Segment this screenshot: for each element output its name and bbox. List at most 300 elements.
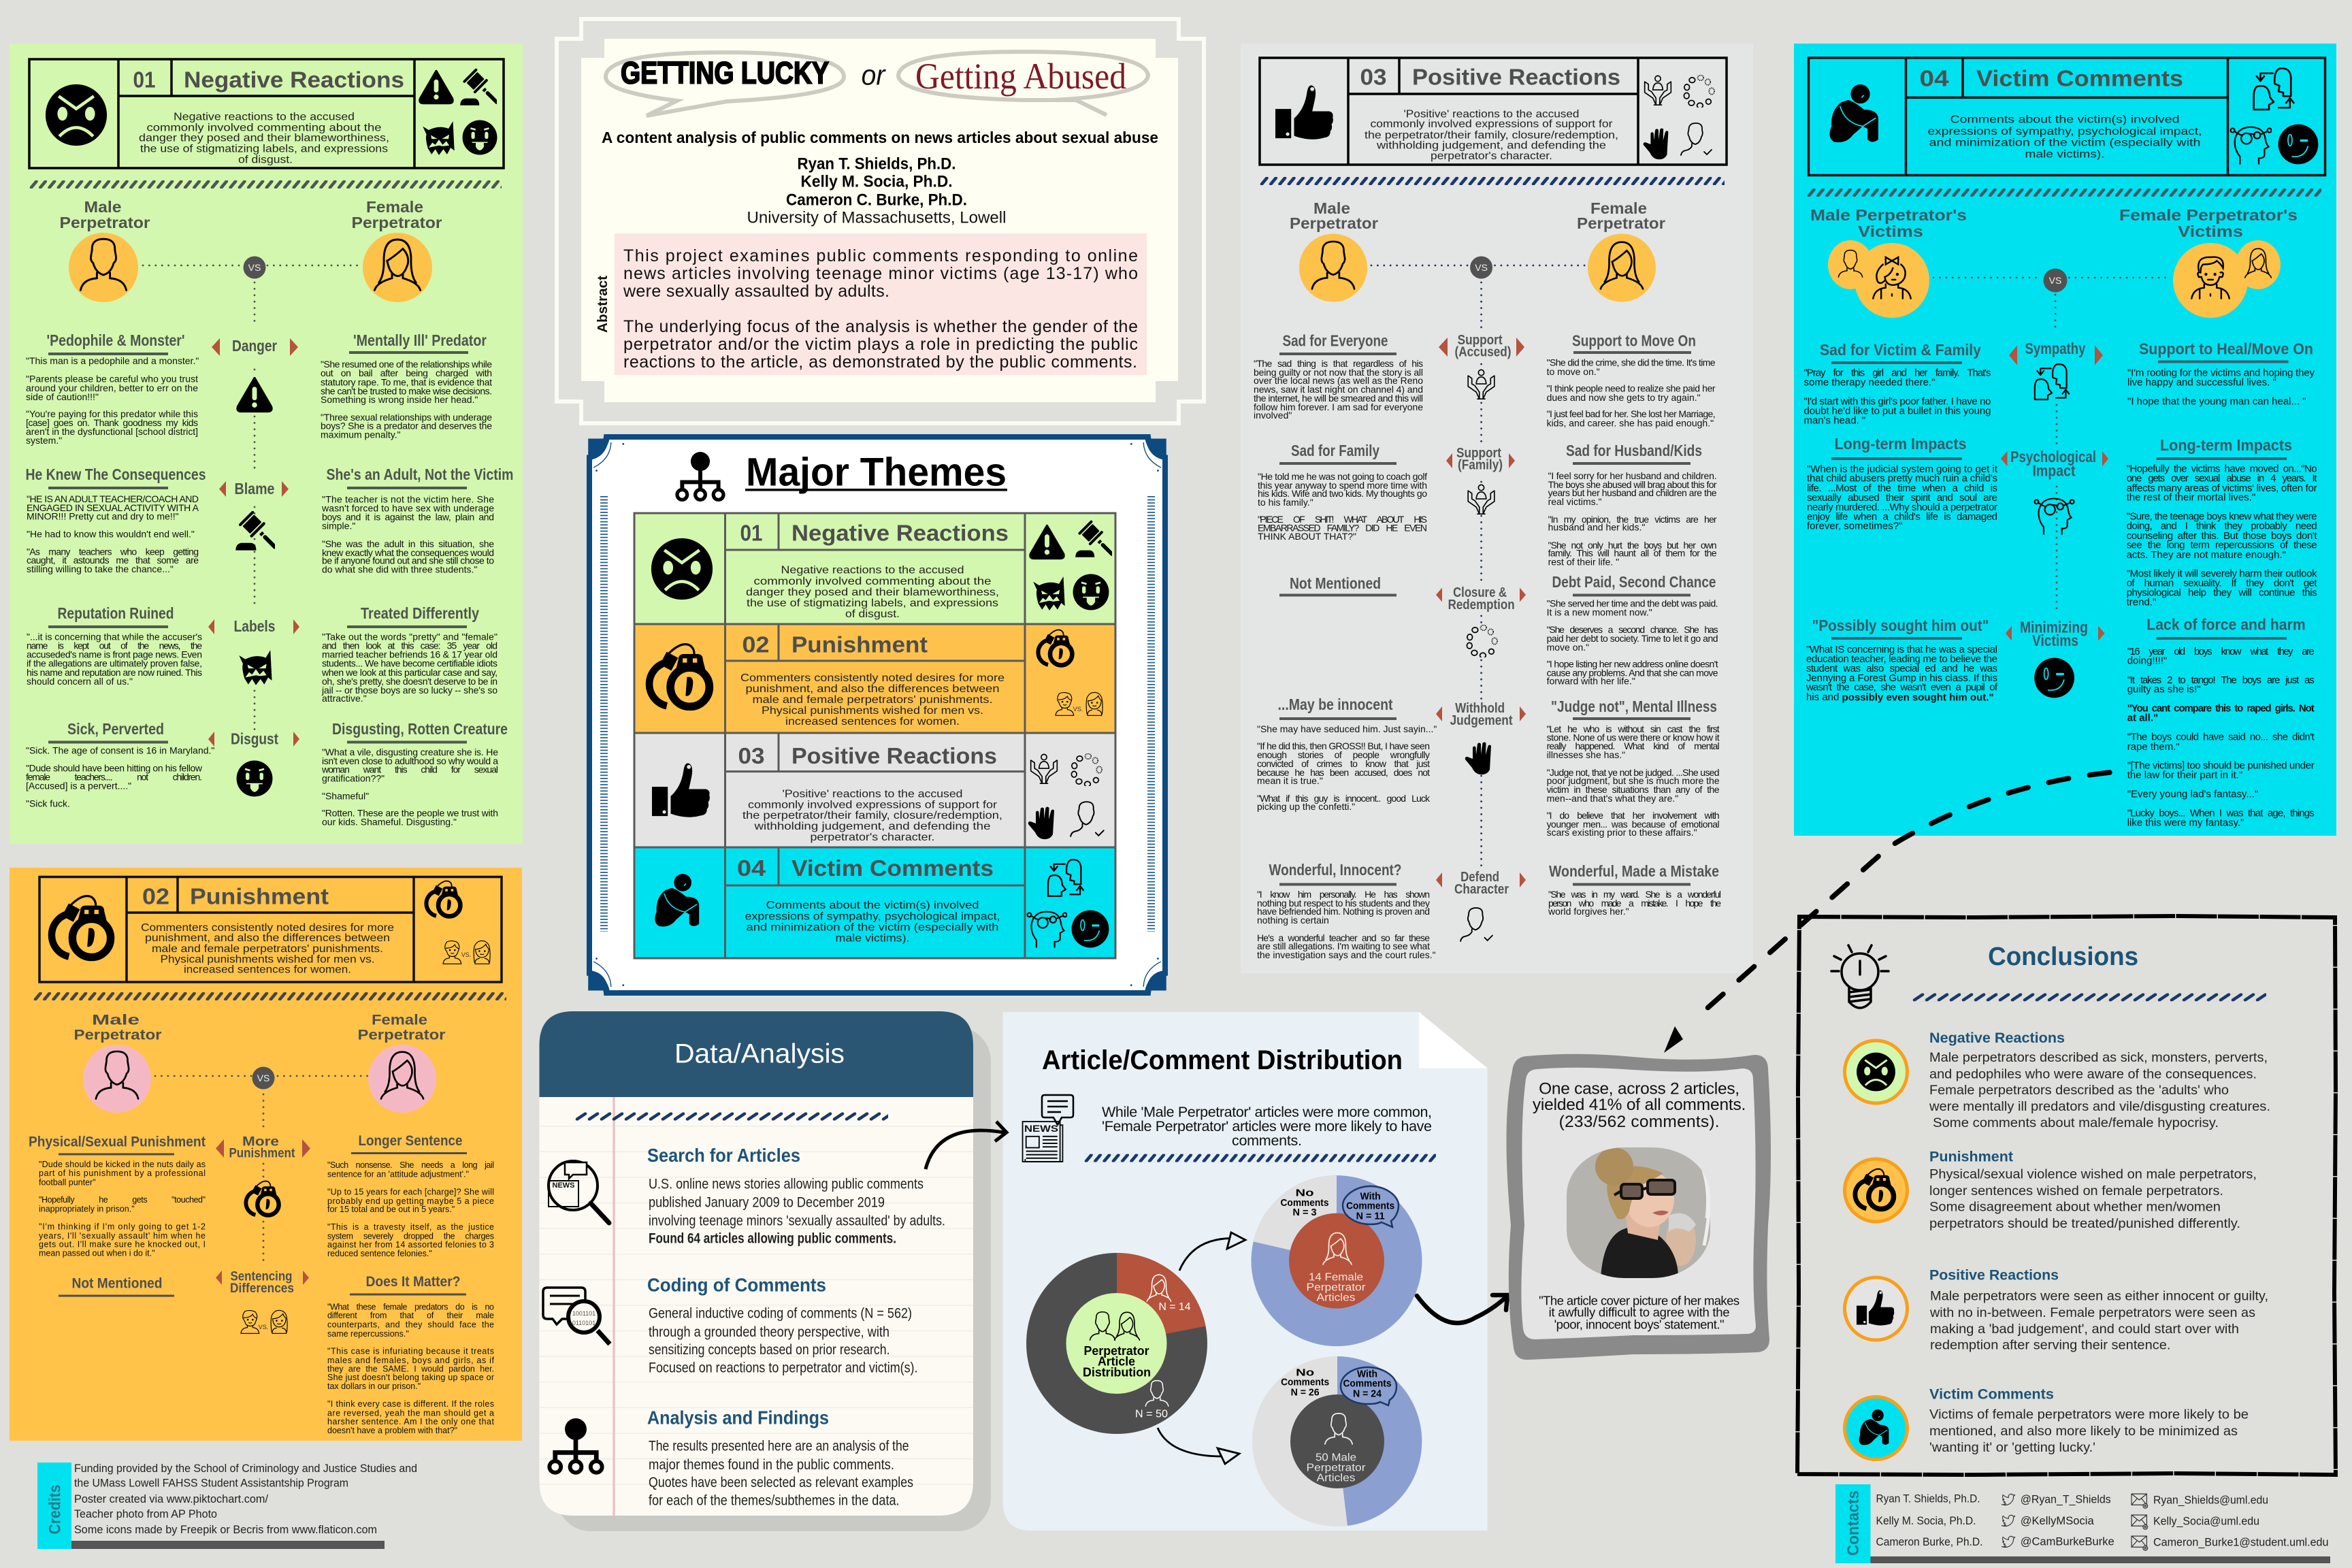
theme: support accused: "I just feel bad for her. She lost her Marriage, <box>1547 408 1716 419</box>
theme: blame: She's an Adult, Not the Victim <box>327 466 513 483</box>
theme: minimizing victims: at all." <box>2127 712 2158 724</box>
chart: female perpetrator articles donut: Comments <box>1346 1200 1394 1211</box>
theme: sympathy: "I'd start with this girl's poor father. I have no <box>1803 396 1991 407</box>
row: 04 victim comments <box>655 855 1109 947</box>
row: 01 negative reactions: the use of stigmatizing labels, and expressions <box>747 598 998 609</box>
theme: psychological impact: enjoy life when a child's life is damaged <box>1807 511 1997 523</box>
heading: conclusions: Conclusions <box>1988 943 2138 971</box>
theme: labels: students... We have become certifiable idiots <box>322 658 497 669</box>
arrow: dashed link from victim comments to teacher case <box>1664 772 2110 1053</box>
theme: support accused: "She did the crime, she did the time. It's time <box>1547 357 1716 368</box>
theme: blame: "HE IS AN ADULT TEACHER/COACH AND <box>27 493 199 504</box>
theme: disgust: [Accused] is a pervert...." <box>26 781 131 791</box>
theme: psychological impact: sexually abused their spirit and soul are <box>1807 492 1997 504</box>
theme: disgust: "Sick. The age of consent is 16 in Maryland." <box>26 745 214 755</box>
chart: male perpetrator articles donut: Articles <box>1316 1473 1356 1484</box>
theme: disgust: female teachers.... not children. <box>26 772 202 783</box>
header: positive reactions: commonly involved expressions of support for <box>1371 118 1613 130</box>
contacts: Kelly M. Socia, Ph.D. <box>1876 1514 1976 1527</box>
theme: more punishment: years, I'll 'sexually assault' him when he <box>39 1231 206 1241</box>
row: 01 negative reactions: Negative reactions to the accused <box>781 565 964 576</box>
conclusion: negative reactions: Negative Reactions <box>1929 1030 2065 1046</box>
contacts: @KellyMSocia <box>2021 1514 2094 1527</box>
theme: support family: this year anyway to spend more time with <box>1258 480 1427 491</box>
title: GETTING LUCKY <box>621 56 829 90</box>
theme: psychological impact <box>1807 435 2317 608</box>
conclusion: punishment: Punishment <box>1929 1149 2013 1165</box>
theme: more punishment: Punishment <box>229 1146 295 1161</box>
male vs female heading row: VS <box>1475 262 1488 273</box>
theme: danger: aren't in the dysfunctional [school district] <box>26 426 198 437</box>
header: punishment <box>39 877 502 982</box>
theme: minimizing victims: doing!!!!" <box>2127 655 2167 667</box>
abstract: This project examines public comments responding to online <box>623 246 1138 265</box>
theme: support accused <box>1254 332 1716 429</box>
subtitle and authors: Ryan T. Shields, Ph.D. <box>798 155 956 173</box>
theme: closure and redemption: Not Mentioned <box>1290 574 1381 592</box>
theme: more punishment <box>29 1133 494 1258</box>
panel: 01 negative reactions <box>10 44 523 844</box>
theme: disgust: woman want this child for sexual <box>321 764 498 774</box>
header: victim comments <box>1809 58 2325 176</box>
theme: minimizing victims <box>1806 616 2315 829</box>
theme: disgust: "What a vile, disgusting creature she is. He <box>322 747 498 757</box>
theme: closure and redemption: paid her debt to society. Time to let it go and <box>1547 633 1718 644</box>
arrow: female articles to teacher case <box>1417 1295 1507 1323</box>
theme: disgust: Sick, Perverted <box>67 720 164 738</box>
theme: support family: EMBARRASSED FAMILY? DID HE EVEN <box>1258 523 1427 534</box>
subtitle and authors: University of Massachusetts, Lowell <box>747 208 1006 227</box>
theme: closure and redemption: "I hope listing her new address online doesn't <box>1547 659 1718 670</box>
theme: more punishment: against her from 14 assorted felonies to 3 <box>327 1240 494 1250</box>
theme: blame: wasn't forced to have sex with underage <box>321 503 494 514</box>
credits: Poster created via www.piktochart.com/ <box>74 1492 268 1505</box>
male vs female heading row: Female <box>372 1013 427 1028</box>
header: negative reactions: commonly involved commenting about the <box>147 122 382 133</box>
theme: withhold judgement: Judgement <box>1450 713 1513 728</box>
male vs female victims heading row: Male Perpetrator's <box>1810 206 1967 224</box>
conclusion: victim comments: Victim Comments <box>1929 1387 2054 1402</box>
theme: disgust: "Dude should have been hitting on his fellow <box>26 762 203 773</box>
subtitle and authors <box>602 129 1158 227</box>
header: positive reactions: Positive Reactions <box>1412 64 1620 90</box>
header: negative reactions: the use of stigmatizing labels, and expressions <box>140 143 388 155</box>
row: 01 negative reactions: Negative Reactions <box>791 520 1009 546</box>
theme: defend character <box>1257 861 1721 960</box>
heading: article/comment distribution: Article/Comment Distribution <box>1042 1045 1403 1075</box>
theme: support accused: (Accused) <box>1455 344 1511 359</box>
theme: closure and redemption: forward with her life." <box>1547 676 1635 687</box>
theme: withhold judgement: "If he did this, then GROSS!! But, I have seen <box>1257 740 1430 751</box>
theme: blame: "He had to know this wouldn't end well." <box>27 528 195 539</box>
row: 02 punishment: Commenters consistently noted desires for more <box>740 672 1004 684</box>
theme: sentencing differences: Does It Matter? <box>366 1274 460 1290</box>
header: positive reactions: 'Positive' reactions to the accused <box>1403 109 1579 120</box>
male vs female heading row: Perpetrator <box>351 214 442 231</box>
theme: psychological impact: "Sure, the teenage boys knew what they were <box>2127 510 2317 523</box>
male vs female heading row: Perpetrator <box>1290 214 1378 232</box>
theme: labels: Treated Differently <box>361 604 479 622</box>
male vs female heading row: Perpetrator <box>1577 214 1665 232</box>
arrow: to female articles <box>1179 1232 1245 1271</box>
row: 03 positive reactions: withholding judgement, and defending the <box>753 821 991 832</box>
header: positive reactions: the perpetrator/their family, closure/redemption, <box>1365 129 1618 141</box>
header: victim comments: male victims). <box>2025 148 2104 161</box>
row: 03 positive reactions: perpetrator's character. <box>810 832 935 843</box>
step: coding of comments: Focused on reactions to perpetrator and victim(s). <box>649 1360 917 1376</box>
header: negative reactions: 01 <box>133 67 155 93</box>
theme: support family: "I feel sorry for her husband and children. <box>1548 470 1717 481</box>
theme: sentencing differences: same repercussions." <box>327 1329 409 1339</box>
theme: labels: accuseded's name is front page news. Even <box>27 649 202 660</box>
theme: blame: stilling willing to take the chance..." <box>27 564 174 574</box>
title: or <box>862 59 886 91</box>
theme: support family: his kids. Wife and two kids. My thoughts go <box>1258 488 1427 499</box>
theme: psychological impact: "Most likely it will severely harm their outlook <box>2127 568 2317 580</box>
male vs female victims heading row: Victims <box>1858 223 1923 240</box>
theme: labels: jail -- or those boys are so lucky -- she's so <box>321 685 497 696</box>
step: search for articles: Found 64 articles allowing public comments. <box>649 1230 896 1247</box>
credits: Funding provided by the School of Criminology and Justice Studies and <box>74 1462 417 1475</box>
theme: defend character: world forgives her." <box>1548 906 1629 917</box>
theme: psychological impact: counseling after this. But those boys don't <box>2127 530 2317 542</box>
theme: labels: "Take out the words "pretty" and "female" <box>322 632 497 642</box>
theme: psychological impact: of human sexuality. If they don't get <box>2127 577 2317 589</box>
step: coding of comments: Coding of Comments <box>647 1274 826 1296</box>
theme: minimizing victims: "It takes 2 to tango! The boys are just as <box>2127 674 2315 686</box>
conclusion: punishment: longer sentences wished on female perpetrators. <box>1929 1183 2223 1198</box>
theme: support family: "In my opinion, the true victims are her <box>1548 514 1717 525</box>
step: search for articles: U.S. online news stories allowing public comments <box>649 1176 924 1192</box>
male vs female heading row: VS <box>257 1073 270 1083</box>
row: 02 punishment: Physical punishments wished for men vs. <box>762 705 983 717</box>
theme: sympathy: "I hope that the young man can heal... " <box>2127 396 2306 407</box>
theme: support family: Support <box>1456 446 1501 461</box>
theme: danger: [case] goes on. Thank goodness my kids <box>26 417 198 428</box>
theme: withhold judgement: younger men... was because of emotional <box>1547 819 1720 830</box>
theme: blame: caught, it astounds me that some are <box>27 555 199 566</box>
theme: more punishment: reduced sentence felonies." <box>327 1249 432 1258</box>
header: punishment: VS. <box>461 951 471 958</box>
header: punishment: male and female perpetrators' punishments. <box>152 943 383 955</box>
step: search for articles <box>549 1145 945 1247</box>
row: 02 punishment: 02 <box>742 632 769 657</box>
header: negative reactions: Negative reactions to the accused <box>174 112 355 122</box>
credits <box>37 1462 417 1549</box>
step: coding of comments: 1001101 <box>572 1310 595 1317</box>
male vs female heading row: Perpetrator <box>60 214 150 231</box>
theme: labels: if the allegations are ultimately proven false, <box>27 658 202 669</box>
theme: blame: be if anyone found out and she still chose to <box>322 555 494 566</box>
row: 02 punishment <box>649 630 1102 728</box>
theme: sympathy: "I'm rooting for the victims and hoping they <box>2127 368 2315 378</box>
theme: sentencing differences: tax dollars in our prison." <box>327 1382 421 1391</box>
theme: support family: husband and her kids." <box>1548 522 1645 533</box>
callout: teacher case photo card: (233/562 comments). <box>1559 1113 1720 1131</box>
theme: sentencing differences: VS. <box>259 1324 268 1330</box>
theme: disgust: isn't even close to adulthood so why would a <box>322 755 498 766</box>
theme: more punishment: inappropriately in prison." <box>39 1205 135 1214</box>
theme: support accused: over the local news (as well as the Reno <box>1254 375 1423 386</box>
theme: support accused: "I think people need to realize she paid her <box>1547 383 1716 394</box>
theme: sympathy: Sad for Victim & Family <box>1820 341 1981 359</box>
theme: minimizing victims: wasn't the case, she wasn't even a pupil of <box>1806 682 1998 693</box>
theme: support family: "She not only hurt the boys but her own <box>1548 540 1717 551</box>
theme: minimizing victims: "You cant compare this to raped girls. Not <box>2127 702 2315 715</box>
callout: teacher case photo card: "The article cover picture of her makes <box>1539 1293 1740 1308</box>
conclusion: negative reactions: were mentally ill predators and vile/disgusting creatures. <box>1929 1099 2270 1114</box>
theme: more punishment: part of his punishment by a professional <box>39 1169 206 1178</box>
theme: danger: boys? She is a predator and deserves the <box>321 421 492 431</box>
theme: support family: years but her husband and children are the <box>1548 487 1717 498</box>
theme: psychological impact: that child abusers pretty much ruin a child's <box>1807 472 1997 485</box>
contacts: Cameron_Burke1@student.uml.edu <box>2153 1535 2329 1549</box>
row: 03 positive reactions: 03 <box>738 743 765 768</box>
theme: labels: and then look at this case: 35 year old <box>322 640 497 651</box>
row: 02 punishment: VS. <box>1073 706 1083 713</box>
theme: more punishment: for 15 total and be out in 5 years." <box>327 1205 455 1214</box>
heading <box>677 451 1007 500</box>
male vs female heading row: Female <box>1590 199 1647 217</box>
icon: light bulb <box>1831 945 1889 1008</box>
row: 02 punishment: male and female perpetrators' punishments. <box>753 694 992 706</box>
theme: psychological impact: the rest of their mortal lives." <box>2127 491 2255 504</box>
header: victim comments: 04 <box>1919 65 1949 91</box>
theme: sentencing differences: "I think every case is different. If the roles <box>327 1399 494 1409</box>
theme: support accused: follow him forever. I am sad for everyone <box>1254 402 1423 412</box>
chart: female perpetrator articles donut: N = 3 <box>1293 1207 1316 1218</box>
theme: labels: Labels <box>234 617 275 635</box>
chart: perpetrator article distribution donut <box>1026 1253 1207 1434</box>
theme: sentencing differences: are reversed, yeah the man should get a <box>327 1409 494 1418</box>
theme: more punishment: More <box>242 1135 279 1149</box>
theme: withhold judgement: Withhold <box>1455 701 1505 716</box>
conclusion: positive reactions: making a 'bad judgement', and could start over with <box>1930 1322 2239 1337</box>
step: coding of comments <box>543 1274 917 1376</box>
step: analysis and findings: The results presented here are an analysis of the <box>649 1439 909 1454</box>
theme: minimizing victims: "16 year old boys know what they are <box>2127 646 2315 657</box>
male vs female heading row: Female <box>366 198 423 216</box>
theme: closure and redemption: Debt Paid, Second Chance <box>1552 573 1716 591</box>
theme: psychological impact: affects many areas of victims' lives, often for <box>2127 483 2317 494</box>
theme: closure and redemption: Closure & <box>1453 585 1507 600</box>
theme: more punishment: "I'm thinking if I'm only going to get 1-2 <box>39 1222 206 1232</box>
theme: defend character: Character <box>1454 882 1509 897</box>
heading: data/analysis: Data/Analysis <box>674 1039 845 1068</box>
conclusion: victim comments: mentioned, and also more likely to be minimized as <box>1929 1424 2238 1439</box>
header: negative reactions: danger they posed and their blameworthiness, <box>139 132 389 144</box>
theme: support family: THINK ABOUT THAT?" <box>1258 531 1356 542</box>
conclusion: negative reactions: Some comments about male/female hypocrisy. <box>1933 1115 2219 1130</box>
theme: labels: Reputation Ruined <box>57 604 174 622</box>
theme: psychological impact: doing, and I think they probably need <box>2127 520 2317 532</box>
theme: psychological impact: acts. They are not mature enough." <box>2127 549 2286 561</box>
themes table <box>634 513 1120 958</box>
theme: danger: out on bail after being charged with <box>321 368 492 378</box>
chart: perpetrator article distribution donut: Article <box>1098 1355 1135 1369</box>
theme: psychological impact: Long-term Impacts <box>1835 435 1967 453</box>
panel: data and analysis <box>539 1011 991 1531</box>
theme: defend character: nothing but respect to his students and they <box>1257 898 1430 909</box>
photo: teacher illustration <box>1567 1147 1710 1278</box>
step: analysis and findings: major themes found in the public comments. <box>649 1457 894 1473</box>
credits: Teacher photo from AP Photo <box>74 1507 217 1520</box>
theme: disgust: "Shameful" <box>322 791 369 802</box>
theme: minimizing victims: "[The victims] too should be punished under <box>2127 760 2315 772</box>
theme: sympathy: Support to Heal/Move On <box>2139 340 2313 358</box>
theme: support family: "He told me he was not going to coach golf <box>1258 471 1427 482</box>
conclusion: positive reactions: with no in-between. Female perpetrators were seen as <box>1929 1305 2255 1320</box>
chart: female perpetrator articles donut <box>1251 1175 1422 1346</box>
header: positive reactions <box>1260 58 1727 165</box>
conclusion: positive reactions <box>1844 1267 2268 1353</box>
text block: distribution summary: While 'Male Perpetrator' articles were more common, <box>1102 1104 1432 1120</box>
theme: danger: statutory rape. To me, that is evidence that <box>321 377 492 388</box>
theme: labels: married teacher befriends 16 & 17 year old <box>322 649 497 660</box>
theme: danger: 'Mentally Ill' Predator <box>353 331 487 349</box>
theme: support accused: "The sad thing is that regardless of his <box>1254 358 1423 369</box>
row: 04 victim comments: Victim Comments <box>791 855 994 881</box>
row: 01 negative reactions <box>651 520 1120 620</box>
theme: support family: real victims." <box>1548 496 1601 507</box>
theme: withhold judgement: enough stories of people wrongfully <box>1257 749 1430 760</box>
header: victim comments: expressions of sympathy, psychological impact, <box>1927 126 2202 137</box>
theme: sympathy: man's head. " <box>1803 415 1865 426</box>
header: negative reactions: of disgust. <box>238 154 293 166</box>
theme: support accused: kids, and career. she has paid enough." <box>1547 418 1714 429</box>
theme: danger: around your children, better to err on the <box>26 382 198 393</box>
theme: minimizing victims: "Every young lad's fantasy..." <box>2127 788 2258 800</box>
theme: defend character: nothing is certain <box>1257 915 1329 926</box>
theme: support family: Sad for Husband/Kids <box>1566 442 1702 459</box>
theme: support accused: dues and now she gets to try again." <box>1547 392 1701 403</box>
header: victim comments: Comments about the victim(s) involved <box>1950 114 2179 125</box>
theme: sentencing differences: different from that of their male <box>327 1311 494 1320</box>
theme: closure and redemption: It is a new moment now." <box>1547 607 1652 618</box>
theme: sympathy: some therapy needed there." <box>1803 377 1935 388</box>
theme: more punishment: probably end up getting maybe 5 a piece <box>327 1196 494 1206</box>
theme: blame <box>26 466 513 574</box>
header: positive reactions: withholding judgement, and defending the <box>1376 140 1606 151</box>
male vs female heading row: Male <box>1313 199 1350 217</box>
theme: blame: He Knew The Consequences <box>26 466 206 483</box>
header: negative reactions: Negative Reactions <box>184 67 404 93</box>
theme: blame: knew exactly what the consequences would <box>322 547 494 558</box>
theme: danger: "She resumed one of the relationships while <box>321 359 492 370</box>
theme: blame: MINOR!!! Pretty cut and dry to me!!" <box>27 510 179 521</box>
icon: news with comment <box>1023 1095 1073 1162</box>
theme: defend character: have befriended him. Nothing is proven and <box>1257 906 1430 917</box>
theme: danger: "Parents please be careful who you trust <box>26 373 198 384</box>
contacts <box>1835 1484 2330 1563</box>
abstract: reactions to the article, as demonstrated by the public comments. <box>623 353 1137 372</box>
theme: support family: family. This will haunt all of them for the <box>1548 547 1717 558</box>
theme: danger: Danger <box>232 337 277 355</box>
theme: withhold judgement: scars existing prior to these affairs." <box>1547 827 1697 838</box>
theme: sentencing differences: Not Mentioned <box>72 1275 162 1292</box>
theme: sentencing differences: they are the SAME. I would pardon her. <box>327 1364 494 1373</box>
row: 04 victim comments: male victims). <box>836 932 909 944</box>
theme: danger: "This man is a pedophile and a monster." <box>26 355 199 366</box>
theme: closure and redemption: "She served her time and the debt was paid. <box>1547 598 1718 609</box>
theme: disgust: our kids. Shameful. Disgusting." <box>322 817 457 828</box>
theme: withhold judgement: "What if this guy is innocent.. good Luck <box>1257 793 1431 804</box>
theme: more punishment: "This is a travesty itself, as the justice <box>327 1222 494 1232</box>
theme: withhold judgement: really happened. What kind of mental <box>1547 740 1720 751</box>
theme: more punishment: Physical/Sexual Punishment <box>29 1134 206 1150</box>
panel: 04 victim comments <box>1794 44 2336 836</box>
theme: support family: "PIECE OF SHIT! WHAT ABOUT HIS <box>1258 514 1427 525</box>
chart: male perpetrator articles donut: Perpetrator <box>1307 1462 1366 1474</box>
chart: perpetrator article distribution donut: Distribution <box>1083 1365 1151 1379</box>
row: 01 negative reactions: 01 <box>740 520 762 546</box>
theme: withhold judgement: "Judge not, that ye not be judged. ...She used <box>1547 767 1720 778</box>
chart: perpetrator article distribution donut: N = 14 <box>1158 1301 1191 1313</box>
header: positive reactions: 03 <box>1360 64 1387 90</box>
abstract: The underlying focus of the analysis is whether the gender of the <box>623 317 1138 336</box>
panel: major themes <box>588 437 1166 993</box>
header: punishment: punishment, and also the differences between <box>145 932 390 944</box>
theme: minimizing victims: rape them." <box>2127 741 2180 753</box>
theme: danger: "You're paying for this predator while this <box>26 408 198 419</box>
subtitle and authors: A content analysis of public comments on news articles about sexual abuse <box>602 129 1158 146</box>
theme: more punishment: "Hopefully he gets "touched" <box>39 1195 206 1205</box>
theme: withhold judgement: illnesses she has." <box>1547 749 1625 760</box>
conclusion: negative reactions: Male perpetrators described as sick, monsters, perverts, <box>1929 1050 2268 1065</box>
contacts: Contacts <box>1844 1490 1863 1556</box>
theme: minimizing victims: education teacher, leading me to believe the <box>1806 653 1997 665</box>
header: punishment: Commenters consistently noted desires for more <box>141 922 394 934</box>
conclusion: victim comments: Victims of female perpetrators were more likely to be <box>1929 1407 2249 1422</box>
theme: support accused: to move on." <box>1547 366 1600 377</box>
theme: support accused: Sad for Everyone <box>1282 332 1388 350</box>
contacts: Ryan T. Shields, Ph.D. <box>1876 1492 1980 1505</box>
theme: blame: boys and it is against the law, plain and <box>322 512 494 523</box>
conclusion: punishment <box>1844 1149 2257 1231</box>
contacts: @CamBurkeBurke <box>2021 1535 2114 1548</box>
theme: minimizing victims: "Lucky boys... When I was that age, things <box>2127 807 2315 819</box>
row: 04 victim comments: Comments about the victim(s) involved <box>766 900 979 911</box>
abstract: news articles involving teenage minor victims (age 13-17) who <box>623 264 1138 283</box>
callout: teacher case photo card: 'poor, innocent boys' statement." <box>1554 1318 1725 1331</box>
step: analysis and findings: Quotes have been selected as relevant examples <box>649 1475 913 1490</box>
theme: sentencing differences: males and females, boys and girls, as if <box>327 1356 495 1365</box>
panel: 02 punishment <box>10 868 522 1441</box>
theme: defend character: Wonderful, Innocent? <box>1269 861 1402 879</box>
chart: female perpetrator articles donut: Articles <box>1316 1292 1356 1304</box>
theme: minimizing victims: "The boys could have said no... she didn't <box>2127 731 2315 743</box>
row: 02 punishment: punishment, and also the differences between <box>746 683 999 695</box>
row: 03 positive reactions: Positive Reactions <box>791 743 997 768</box>
theme: defend character: the investigation says and the court rules." <box>1257 949 1436 960</box>
theme: blame: "The teacher is not the victim here. She <box>322 494 494 505</box>
text block: distribution summary <box>1102 1104 1432 1149</box>
callout: teacher case photo card <box>1506 1054 1771 1360</box>
theme: blame: Blame <box>234 480 275 497</box>
theme: defend character: are still allegations. I'm waiting to see what <box>1257 941 1430 951</box>
theme: withhold judgement: "Judge not", Mental Illness <box>1551 698 1717 715</box>
theme: sentencing differences: Differences <box>230 1281 294 1296</box>
theme: minimizing victims: Jennying a Forest Gump in his class. If this <box>1806 672 1997 684</box>
chart: male perpetrator articles donut: N = 24 <box>1353 1388 1382 1399</box>
step: coding of comments: sensitizing concepts based on prior research. <box>649 1342 890 1358</box>
theme: minimizing victims: the law for their part in it." <box>2127 769 2242 781</box>
theme: sentencing differences: harsher sentence. Am I the only one that <box>327 1417 495 1426</box>
conclusion: punishment: perpetrators should be treated/punished differently. <box>1929 1216 2240 1231</box>
male vs female heading row: VS <box>248 262 261 273</box>
theme: sympathy: "Pray for this girl and her family. That's <box>1803 368 1991 378</box>
step: search for articles: involving teenage minors 'sexually assaulted' by adults. <box>649 1213 945 1229</box>
